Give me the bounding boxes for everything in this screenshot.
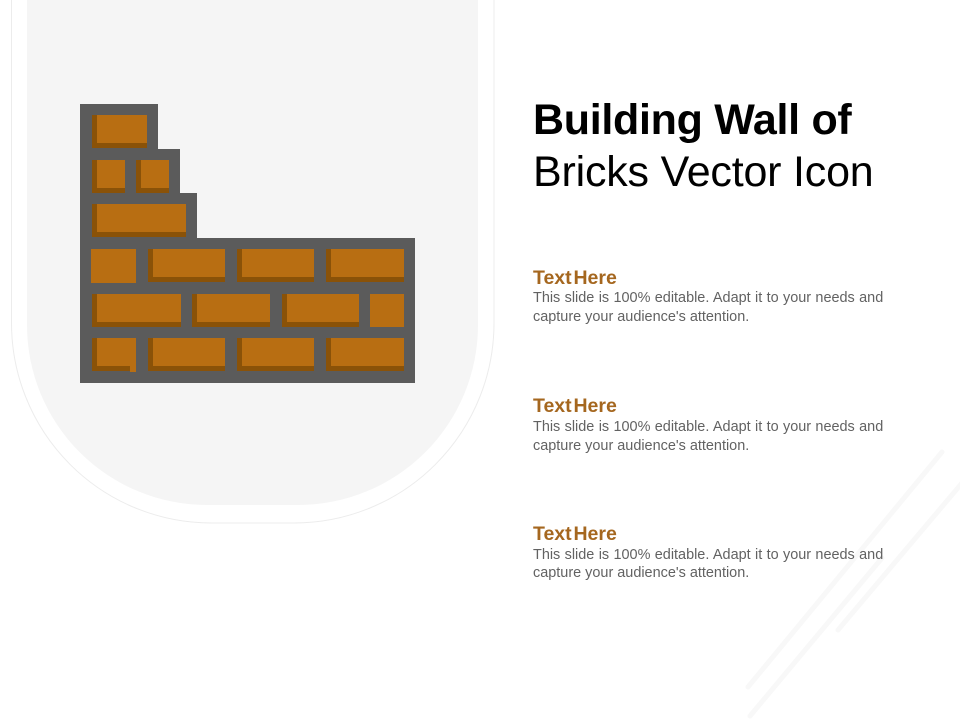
- wall mortar: [80, 104, 415, 383]
- text block 2: Text Here: [533, 395, 617, 417]
- decorative diagonal lines: [748, 452, 960, 716]
- panel: rounded backdrop: [12, 0, 494, 523]
- text block 2: This slide is 100% editable. Adapt it to your needs and: [533, 419, 883, 435]
- brick shadows: [92, 115, 404, 371]
- text block 3: This slide is 100% editable. Adapt it to your needs and: [533, 547, 883, 563]
- text block 3: Text Here: [533, 523, 617, 545]
- title: [533, 96, 874, 196]
- text block 1: This slide is 100% editable. Adapt it to your needs and: [533, 290, 883, 306]
- text block 3: [533, 523, 883, 581]
- title: Bricks Vector Icon: [533, 148, 874, 196]
- brick faces: [91, 115, 404, 372]
- icon: brick wall: [80, 104, 415, 383]
- text block 3: capture your audience's attention.: [533, 565, 749, 581]
- title: Building Wall of: [533, 96, 851, 144]
- text block 1: Text Here: [533, 267, 617, 289]
- text block 2: [533, 395, 883, 454]
- text block 1: [533, 267, 883, 325]
- text block 2: capture your audience's attention.: [533, 438, 749, 454]
- text block 1: capture your audience's attention.: [533, 309, 749, 325]
